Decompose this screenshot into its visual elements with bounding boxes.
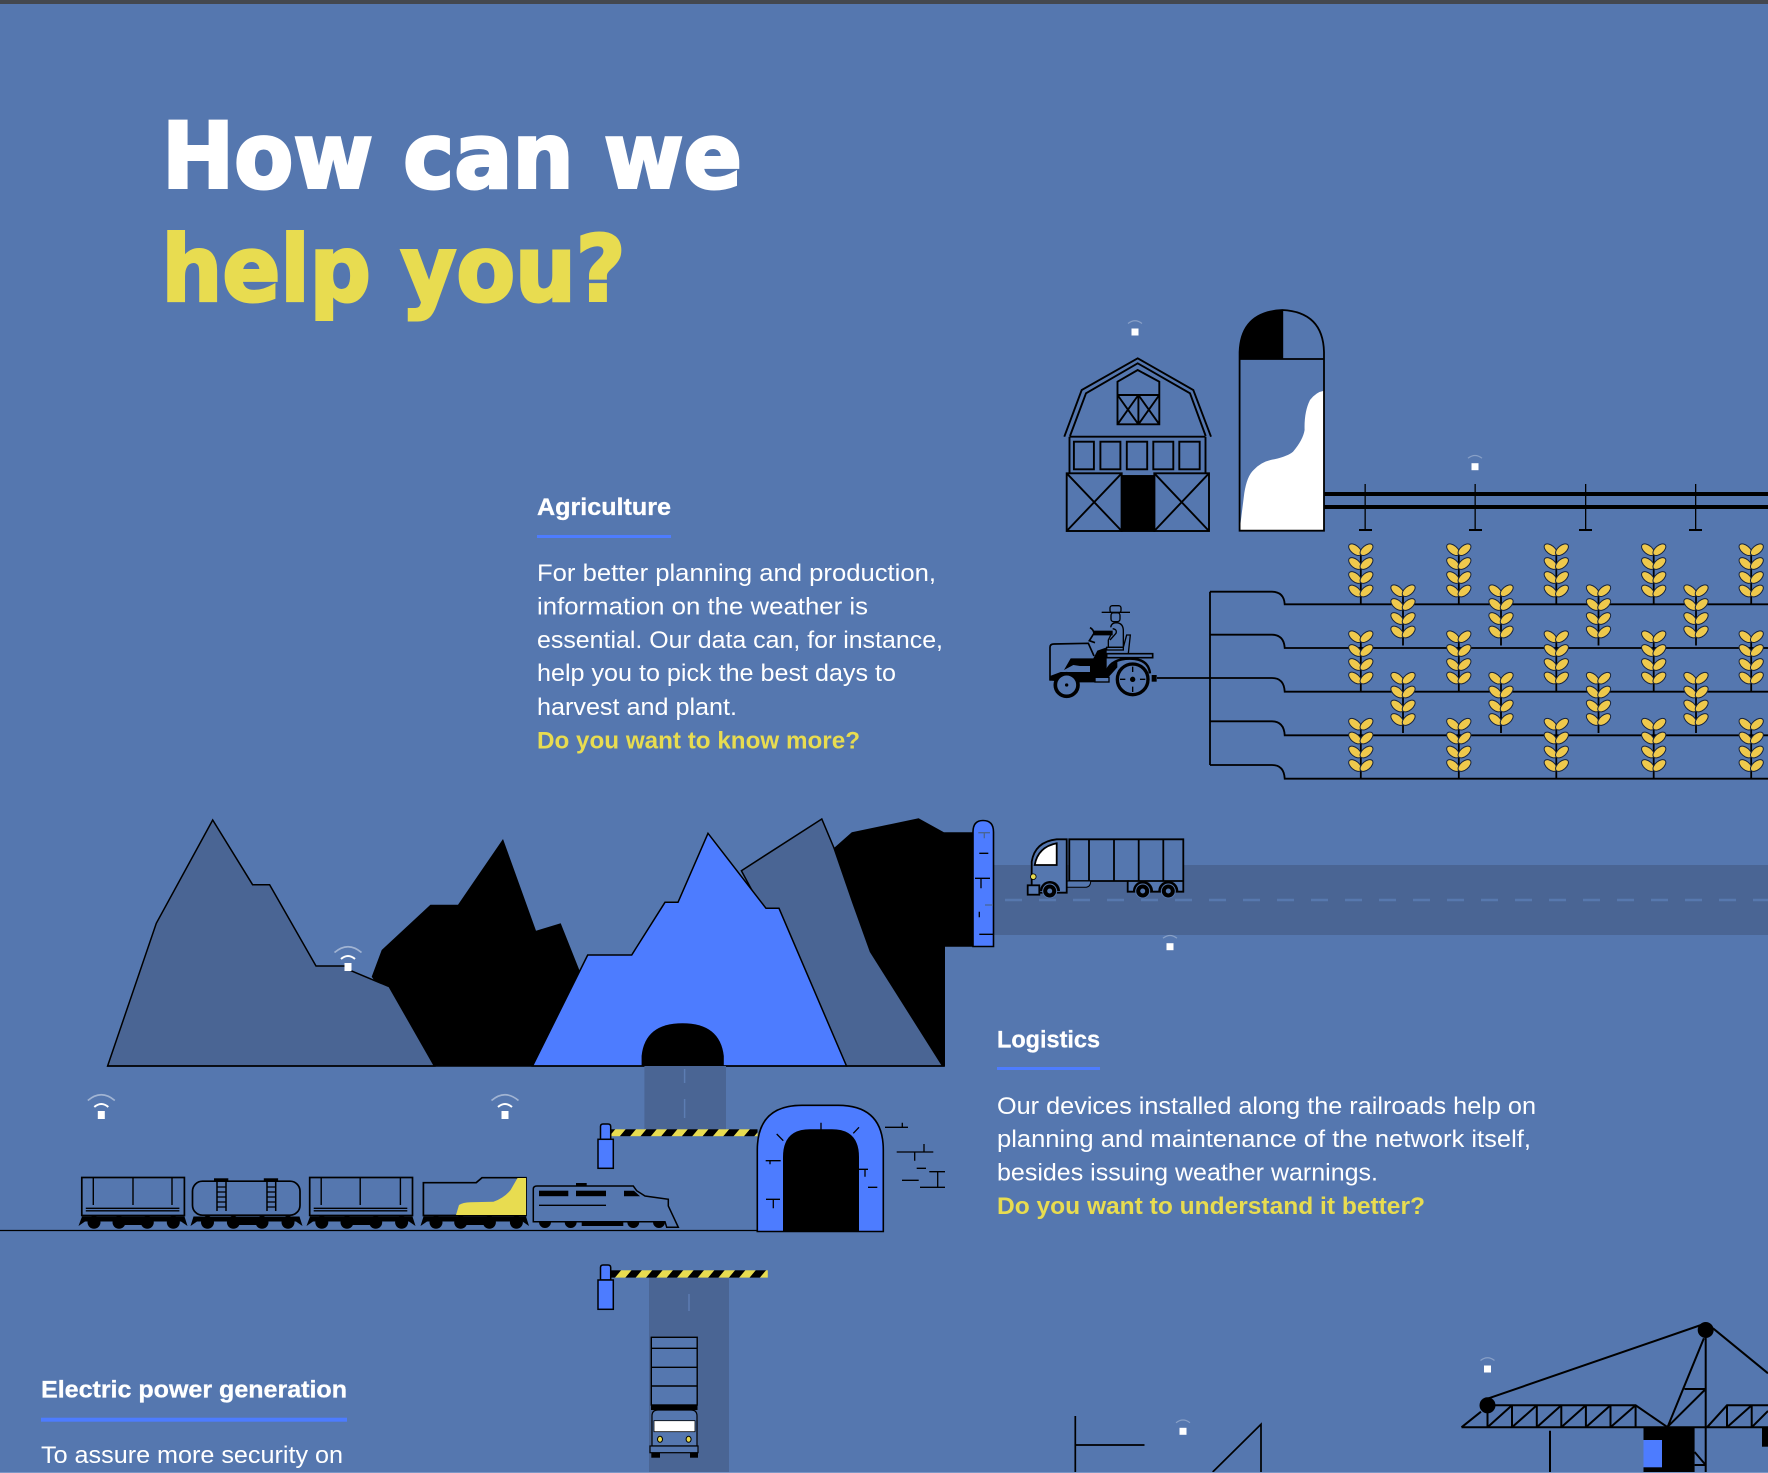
text block: logistics: planning and maintenance of the network itself,: [997, 1126, 1531, 1153]
locomotive: [533, 1183, 678, 1228]
text block: electric power generation: Electric power generation: [41, 1376, 347, 1404]
irrigation lines: [1157, 592, 1768, 779]
tunnel portal: [757, 1105, 883, 1232]
icon: wifi sensor by crane: [1480, 1358, 1494, 1372]
mountain: middle black: [372, 839, 580, 1066]
icon: wind turbine base left: [1075, 1416, 1261, 1472]
text block: agriculture: information on the weather is: [537, 594, 868, 620]
icon: wifi sensor by road: [1163, 935, 1177, 950]
mountains: [107, 818, 973, 1066]
railway track: [0, 1230, 758, 1232]
text block: logistics: Logistics: [997, 1026, 1100, 1054]
icon: wifi sensor on barn: [1128, 321, 1142, 336]
icon: wifi sensor on mountain: [334, 947, 362, 971]
title: help you?: [162, 218, 626, 322]
tunnel pillar: [973, 820, 994, 946]
mountain: rear right grey: [741, 819, 943, 1066]
wheat field: [1347, 542, 1765, 779]
text block: agriculture: Agriculture: [537, 494, 671, 521]
icon: wifi sensor on train left: [88, 1095, 115, 1119]
text block: agriculture: essential. Our data can, for instance,: [537, 627, 943, 654]
text block: agriculture: harvest and plant.: [537, 694, 737, 721]
icon: delivery truck side view: [1028, 839, 1183, 898]
bottom edge: [0, 1472, 1768, 1473]
wagon: box car 1: [78, 1178, 188, 1229]
text block: electric power generation: [41, 1376, 347, 1469]
icon: barn: [1064, 358, 1211, 531]
text block: agriculture: help you to pick the best days to: [537, 660, 896, 687]
text block: logistics: Do you want to understand it better?: [997, 1193, 1425, 1220]
barrier: upper level crossing: [598, 1124, 758, 1168]
text block: logistics: besides issuing weather warnings.: [997, 1160, 1378, 1186]
text block: electric power generation: To assure more security on: [41, 1442, 343, 1469]
icon: silo: [1240, 310, 1324, 531]
loose bricks beside tunnel: [885, 1123, 945, 1187]
text block: agriculture: For better planning and production,: [537, 560, 936, 587]
train: [78, 1178, 678, 1229]
title: [162, 104, 742, 322]
text block: agriculture: Do you want to know more?: [537, 728, 860, 754]
icon: wifi sensor on fence: [1468, 455, 1482, 470]
icon: tractor with farmer: [1050, 606, 1157, 696]
mountain: rear right black: [834, 818, 973, 1066]
icon: truck front view: [650, 1337, 698, 1458]
wagon: tank car: [190, 1178, 302, 1229]
tunnel entrance: [642, 1023, 724, 1066]
icon: wifi sensor on train right: [492, 1095, 518, 1119]
title: How can we: [162, 104, 742, 210]
barrier: lower level crossing: [598, 1265, 768, 1309]
fence: [1324, 484, 1768, 531]
road: logistics highway: [994, 865, 1768, 935]
road: crossing from mountain tunnel: [644, 1066, 726, 1130]
text block: logistics: Our devices installed along the railroads help on: [997, 1093, 1536, 1120]
icon: wifi sensor bottom left: [1176, 1420, 1190, 1435]
wagon: box car 2: [306, 1178, 416, 1229]
text block: logistics: [997, 1026, 1536, 1220]
mountain: left grey: [108, 820, 434, 1066]
text block: agriculture: [537, 494, 943, 754]
icon: port crane: [1462, 1322, 1768, 1472]
mountain: blue with tunnel: [532, 833, 846, 1066]
wagon: hopper with yellow load: [420, 1178, 529, 1229]
road: crossing below railway: [649, 1277, 729, 1473]
